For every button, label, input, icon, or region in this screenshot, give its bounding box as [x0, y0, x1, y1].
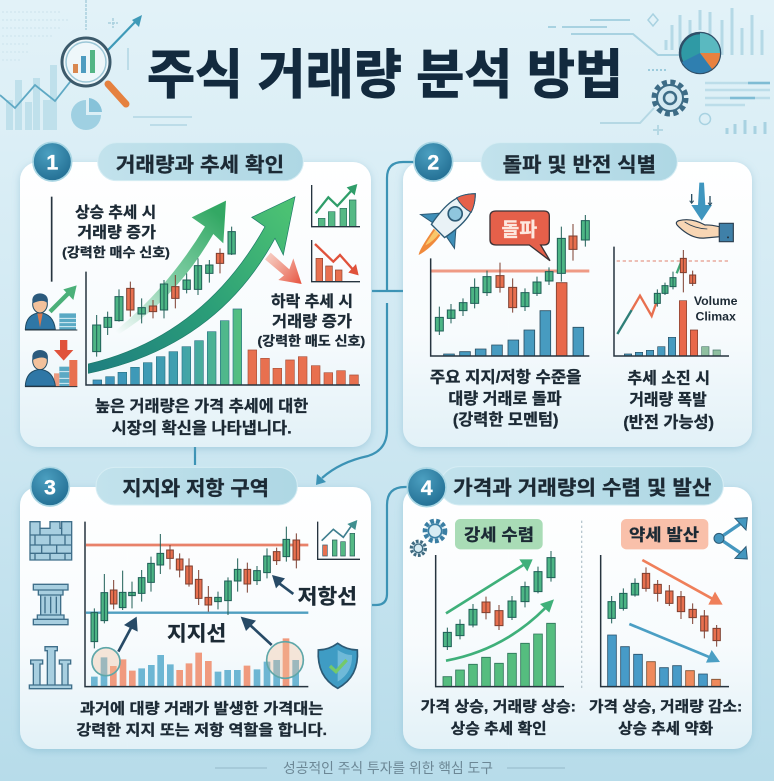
- footer: 성공적인 주식 투자를 위한 핵심 도구: [283, 760, 493, 776]
- callout: breakout: 돌파: [502, 219, 537, 241]
- panel: 1 volume and trend: [25, 142, 365, 437]
- volume bars: [91, 638, 299, 687]
- chart axes right: [601, 555, 729, 687]
- header decoration: left chart: [0, 0, 192, 130]
- arrows left: [446, 559, 554, 661]
- label: bullish convergence: 강세 수렴: [464, 526, 534, 545]
- heading 3: 지지와 저항 구역: [122, 477, 269, 500]
- icon: shield: [318, 643, 357, 688]
- text: exhaustion description: [623, 369, 714, 431]
- text: breakout description: [430, 368, 581, 429]
- icon: investor down: [25, 340, 77, 387]
- text: exhaustion description: (반전 가능성): [623, 413, 714, 431]
- number badge 2: [414, 142, 453, 181]
- number badge 4: 4: [421, 476, 433, 500]
- text: convergence description: 상승 추세 확인: [451, 720, 547, 737]
- panel card 4: [403, 487, 752, 749]
- icon: brick wall: [30, 522, 72, 560]
- volume bars: [444, 283, 584, 356]
- text: downtrend: 거래량 증가: [272, 314, 352, 331]
- label: volume climax: [694, 294, 738, 324]
- resistance line: [86, 541, 308, 549]
- text: uptrend: 거래량 증가: [77, 224, 156, 241]
- header decoration: right tech graphics: [548, 8, 770, 135]
- panel: 4 convergence and divergence: [407, 467, 747, 737]
- heading 3: [96, 467, 297, 505]
- panel: 2 breakout and reversal: [399, 142, 738, 431]
- candles left: [443, 551, 555, 650]
- arrow: faded green upper: [112, 201, 226, 338]
- heading 4: [440, 467, 723, 505]
- text: downtrend: (강력한 매도 신호): [257, 334, 365, 349]
- number badge 3: [31, 467, 69, 506]
- text: panel 1 summary: [95, 398, 308, 437]
- chart axes right: [614, 247, 729, 356]
- heading 2: 돌파 및 반전 식별: [503, 153, 656, 176]
- icon: three pillars: [29, 647, 72, 689]
- icon: investor up: [25, 285, 77, 330]
- icon: mini chart: [318, 520, 360, 559]
- number badge 4: [407, 468, 446, 507]
- icon: hand with down arrow: [676, 183, 733, 242]
- highlight circles: [92, 642, 303, 678]
- label: volume climax: Volume: [694, 294, 738, 308]
- chart axes left: [431, 258, 589, 356]
- resistance line: [431, 266, 589, 275]
- chart axes: [86, 272, 360, 385]
- text: panel 3 summary: [76, 700, 327, 739]
- text: panel 3 summary: 강력한 지지 또는 저항 역할을 합니다.: [76, 722, 327, 739]
- icon: mini down chart: [312, 240, 360, 282]
- label: support: 지지선: [167, 623, 226, 646]
- text: panel 3 summary: 과거에 대량 거래가 발생한 가격대는: [80, 700, 323, 717]
- candlestick chart: [91, 527, 300, 648]
- icon: radar chart: [680, 33, 720, 73]
- panel card 1: [20, 162, 371, 447]
- decorative vertical line: [49, 197, 54, 282]
- volume bars right: [624, 301, 720, 356]
- text: breakout description: 주요 지지/저항 수준을: [430, 368, 581, 386]
- panel card 3: [20, 487, 371, 749]
- title: 주식 거래량 분석 방법: [147, 46, 623, 105]
- text: downtrend: 하락 추세 시: [271, 294, 353, 311]
- number badge 1: [33, 142, 72, 181]
- heading 4: 가격과 거래량의 수렴 및 발산: [453, 477, 711, 499]
- label: bearish divergence: 약세 발산: [629, 526, 699, 545]
- candlestick chart: [435, 215, 589, 335]
- text: panel 1 summary: 높은 거래량은 가격 추세에 대한: [95, 398, 308, 416]
- chart axes left: [436, 555, 564, 687]
- candlestick chart: [93, 227, 235, 357]
- text: uptrend: [62, 204, 170, 260]
- arrow: red downtrend: [265, 253, 302, 284]
- arrows to support and resistance: [118, 575, 293, 652]
- text: exhaustion description: 추세 소진 시: [627, 369, 710, 387]
- number badge 2: 2: [427, 150, 439, 174]
- icon: mini up chart: [312, 184, 360, 227]
- candles right: [654, 250, 696, 307]
- heading 2: [481, 143, 677, 181]
- text: divergence description: [589, 699, 742, 737]
- price line: [617, 258, 683, 334]
- panel: 3 support and resistance: [29, 467, 360, 739]
- chart axes: [85, 522, 308, 687]
- icon: gear: [654, 82, 686, 114]
- divider: [580, 521, 584, 689]
- label: volume climax: Climax: [695, 310, 736, 324]
- text: uptrend: (강력한 매수 신호): [62, 245, 170, 260]
- heading 1: 거래량과 추세 확인: [116, 153, 284, 176]
- icon: column: [33, 584, 68, 625]
- number badge 1: 1: [46, 150, 58, 174]
- arrow: main green trend: [88, 197, 295, 373]
- bars right: [608, 635, 720, 687]
- candles right: [608, 567, 720, 647]
- text: divergence description: 가격 상승, 거래량 감소:: [589, 699, 742, 716]
- icon: gears: [411, 521, 445, 555]
- callout: breakout: [490, 211, 550, 261]
- label: resistance: 저항선: [298, 585, 357, 608]
- text: divergence description: 상승 추세 약화: [618, 720, 713, 737]
- support line: [86, 609, 308, 616]
- number badge 3: 3: [44, 475, 56, 499]
- arrows right: [629, 560, 723, 663]
- bars left: [443, 623, 555, 687]
- label: bullish convergence: [455, 519, 543, 549]
- text: panel 1 summary: 시장의 확신을 나타냅니다.: [112, 419, 292, 437]
- dashed peak line: [617, 259, 728, 263]
- text: breakout description: (강력한 모멘텀): [453, 411, 558, 429]
- heading 1: [98, 143, 303, 181]
- connectors between panels: [195, 162, 417, 605]
- icon: branching arrows: [714, 518, 747, 559]
- label: bearish divergence: [621, 519, 708, 549]
- text: convergence description: [421, 699, 576, 737]
- icon: rocket: [399, 177, 492, 270]
- text: breakout description: 대량 거래로 돌파: [448, 390, 562, 408]
- text: convergence description: 가격 상승, 거래량 상승:: [421, 699, 576, 716]
- text: downtrend: [257, 294, 365, 349]
- volume bars: [93, 309, 358, 385]
- text: uptrend: 상승 추세 시: [75, 204, 156, 221]
- icon: magnifying glass: [62, 38, 126, 104]
- text: exhaustion description: 거래량 폭발: [629, 391, 707, 409]
- panel card 2: [403, 162, 752, 447]
